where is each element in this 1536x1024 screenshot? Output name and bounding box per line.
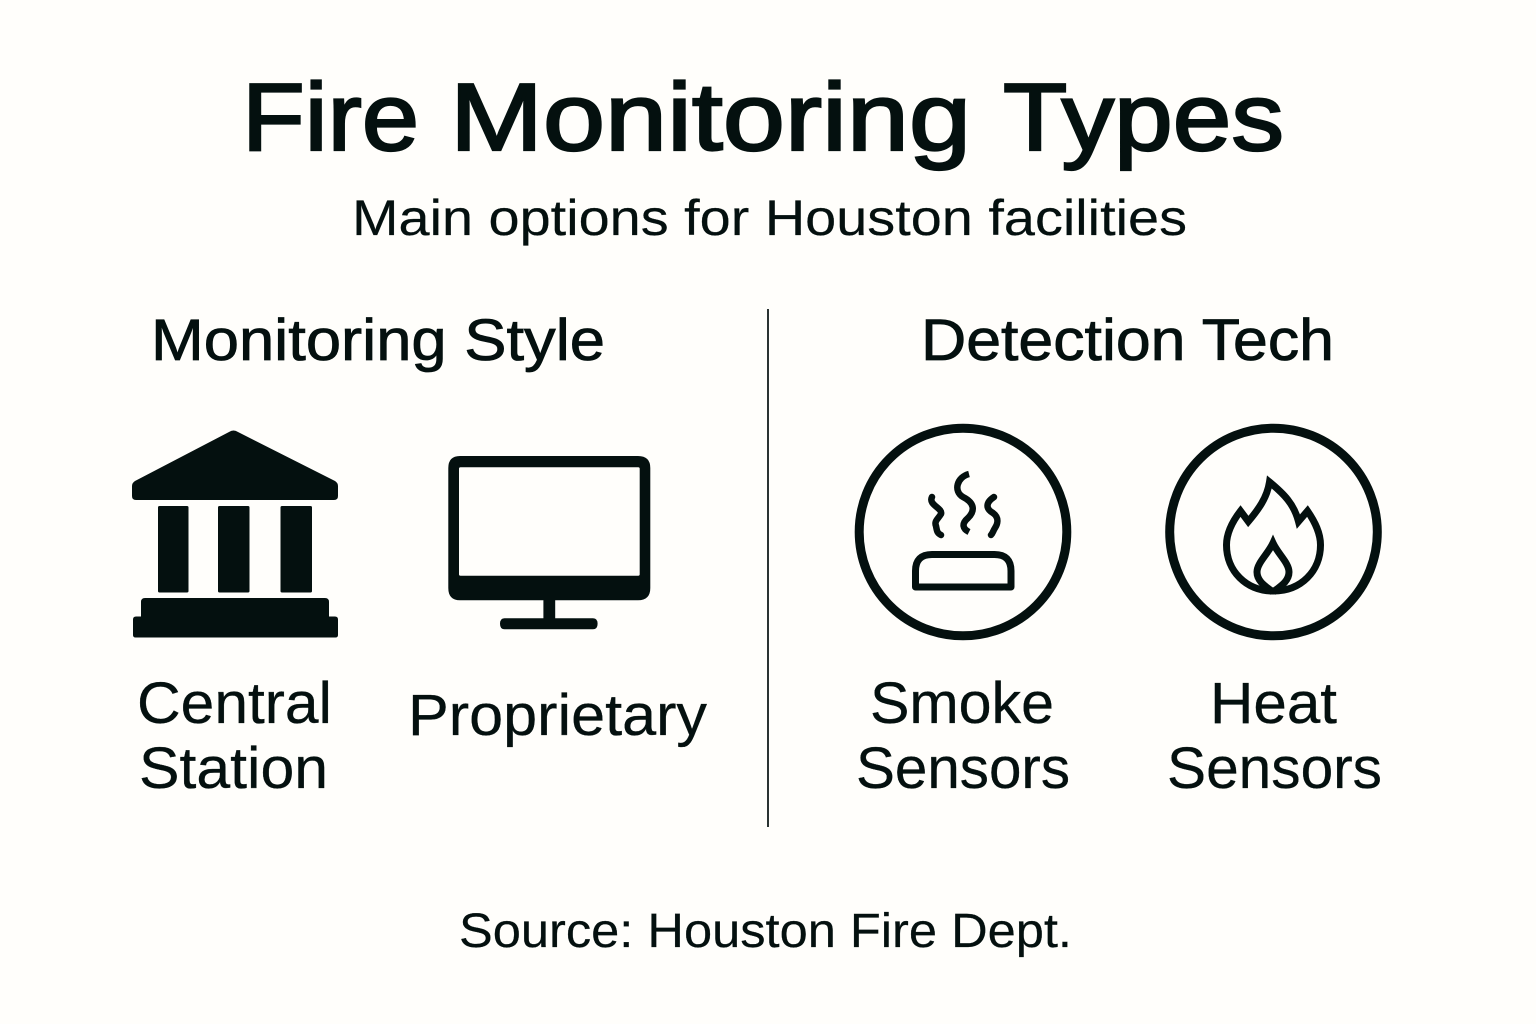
source note: Source: Houston Fire Dept. [459, 905, 1072, 958]
title: Types [1003, 64, 1284, 171]
heading: monitoring style: Monitoring Style [151, 308, 605, 373]
label: smoke sensors: Smoke [870, 671, 1054, 736]
title: Fire [242, 64, 419, 171]
divider [767, 309, 769, 827]
panel: detection tech [856, 308, 1382, 801]
title: Monitoring [450, 64, 971, 171]
label: smoke sensors [856, 671, 1070, 801]
icon: heat sensor [1170, 428, 1377, 636]
label: central station [137, 671, 332, 801]
label: heat sensors: Sensors [1167, 736, 1382, 801]
label: smoke sensors: Sensors [856, 736, 1070, 801]
icon: central station building [132, 430, 338, 638]
label: proprietary: Proprietary [408, 683, 707, 748]
label: heat sensors: Heat [1210, 671, 1337, 736]
heading: detection tech: Detection Tech [921, 308, 1334, 373]
label: heat sensors [1167, 671, 1382, 801]
subtitle: Main options for Houston facilities [352, 190, 1187, 246]
label: central station: Central [137, 671, 332, 736]
icon: proprietary monitor [448, 456, 650, 629]
panel: monitoring style [132, 308, 707, 801]
icon: smoke sensor [859, 428, 1067, 636]
label: central station: Station [139, 736, 328, 801]
